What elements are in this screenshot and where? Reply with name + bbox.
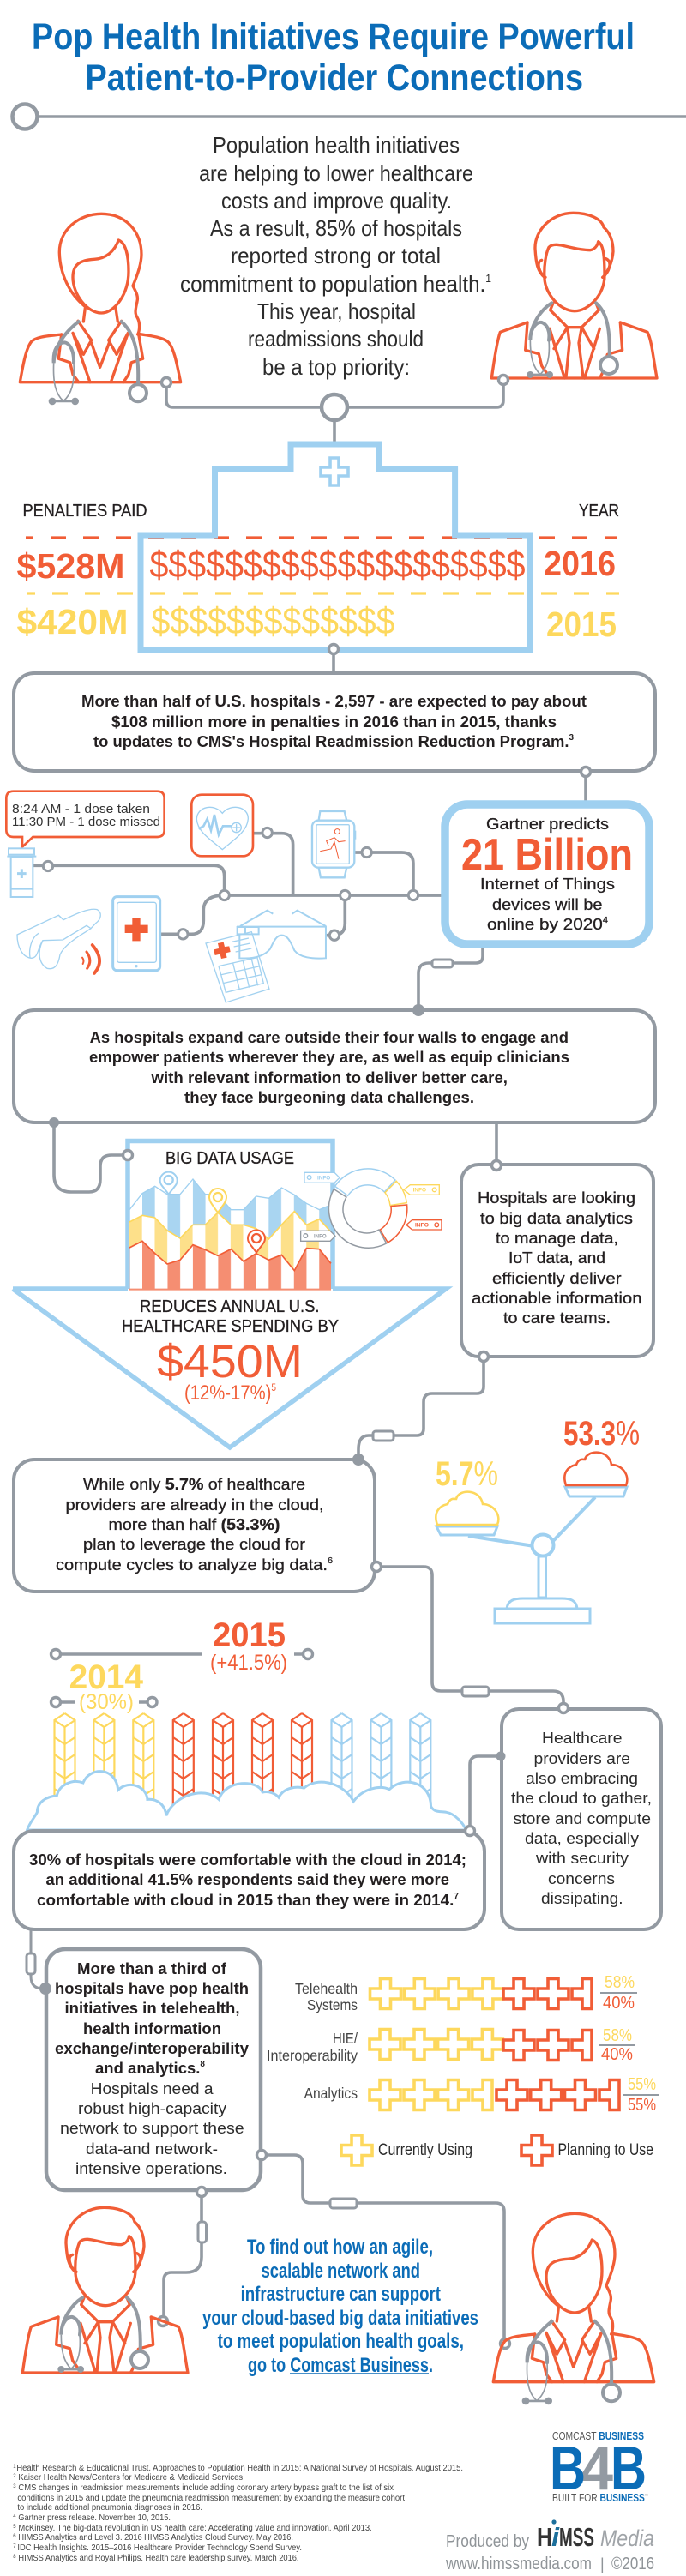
footnotes: CMS changes in readmission measurements include adding coronary artery bypass graft to the list of six — [18, 2483, 394, 2493]
penalties 2015 row: 2015 — [546, 605, 617, 644]
icon: tablet — [113, 897, 160, 971]
panel: pop health initiatives box: hospitals have pop health — [55, 1979, 249, 1997]
title: Patient-to-Provider Connections — [86, 57, 583, 99]
panel: cloud adoption text box: providers are already in the cloud, — [65, 1496, 324, 1514]
panel: penalties text box: More than half of U.S. hospitals - 2,597 - are expected to pay about — [81, 692, 587, 710]
panel: hospitals big data box: actionable information — [472, 1289, 641, 1307]
penalties 2016 row: $528M — [17, 546, 125, 586]
panel: healthcare providers box: store and compute — [513, 1809, 651, 1827]
panel: big data usage — [128, 1141, 333, 1289]
stat: 2014: (30%) — [79, 1690, 134, 1714]
connector: comfort box to pop health box — [27, 1929, 51, 1995]
stat: 5.7%: 5.7% — [436, 1455, 498, 1493]
panel: pop health initiatives box: exchange/interoperability — [55, 2039, 250, 2057]
connector: text box to Gartner — [581, 767, 590, 802]
panel: cloud adoption text box: 6 — [328, 1556, 333, 1566]
panel: penalties text box — [14, 673, 655, 771]
credit: Produced by HiMSS Media — [445, 2519, 654, 2573]
penalties 2015 row — [17, 600, 617, 644]
icon: female doctor bottom right — [493, 2213, 654, 2404]
chart row: HIE / interoperability — [267, 2026, 635, 2064]
panel: pop health initiatives box: robust high-capacity — [78, 2099, 227, 2117]
IoT device network — [6, 791, 446, 1002]
panel: healthcare providers box: providers are — [533, 1749, 630, 1767]
connector: Gartner to hospitals box — [418, 948, 483, 1010]
footnotes: 2 — [13, 2474, 16, 2479]
stat: 2015: 2015 — [213, 1616, 286, 1654]
icon: wifi waves — [82, 945, 99, 973]
dose callout text — [12, 802, 160, 829]
connector: text box to hospitals box — [492, 1122, 501, 1170]
chart row: HIE / interoperability: HIE/ — [333, 2030, 358, 2047]
panel: spending triangle: REDUCES ANNUAL U.S. — [140, 1297, 319, 1316]
panel: spending triangle: HEALTHCARE SPENDING BY — [122, 1317, 339, 1336]
panel: pop health initiatives box: 8 — [200, 2060, 205, 2069]
connector: pop health box to male doctor — [158, 2187, 206, 2326]
penalties header labels: PENALTIES PAID — [22, 502, 147, 521]
connector: text box to big data panel — [49, 1117, 132, 1192]
intro text: As a result, 85% of hospitals — [210, 215, 462, 241]
info tags: INFO — [314, 1234, 327, 1239]
call to action: scalable network and — [262, 2260, 420, 2283]
logo: Comcast Business B4B: BUILT FOR BUSINESS — [552, 2492, 654, 2504]
panel: pop health initiatives box: network to support these — [60, 2119, 244, 2137]
footnotes: McKinsey. The big-data revolution in US health care: Accelerating value and innovation. April 2013. — [18, 2524, 372, 2533]
footnotes: 7 — [13, 2544, 16, 2549]
panel: Gartner prediction: Internet of Things — [480, 875, 615, 893]
icon: map pins — [160, 1172, 265, 1253]
legend — [341, 2135, 653, 2165]
footnotes: 3 — [13, 2484, 16, 2489]
logo: Comcast Business B4B: B — [611, 2435, 647, 2503]
call to action: your cloud-based big data initiatives — [202, 2307, 478, 2330]
footnotes: 8 — [13, 2555, 16, 2560]
chart: data columns — [55, 1713, 430, 1821]
panel: pop health initiatives box: intensive operations. — [75, 2159, 227, 2177]
icon: hospital building — [141, 444, 530, 650]
panel: expanding care text box: empower patients wherever they are, as well as equip clinicians — [89, 1048, 569, 1066]
panel: Gartner prediction — [445, 804, 649, 944]
panel: expanding care text box — [14, 1010, 655, 1122]
connector: cloud box to providers box — [372, 1562, 563, 1708]
logo: Comcast Business B4B: ™ — [645, 2494, 648, 2499]
chart row: HIE / interoperability: 40% — [601, 2045, 633, 2064]
penalties 2015 row: $420M — [17, 602, 129, 641]
info tags: INFO — [413, 1189, 426, 1194]
icon: heart monitor — [191, 795, 253, 856]
chart: donut — [328, 1169, 407, 1248]
footnotes: Health Research & Educational Trust. Approaches to Population Health in 2015: A National Survey of Hospitals. August 2015. — [16, 2464, 463, 2473]
stat: 2015 — [51, 1616, 312, 1675]
legend: Currently Using — [378, 2141, 472, 2159]
icon: smart glasses — [237, 911, 326, 959]
call to action: to meet population health goals, — [218, 2330, 464, 2353]
footnotes: IDC Health Insights. 2015–2016 Healthcare Provider Technology Spend Survey. — [17, 2543, 302, 2553]
panel: cloud adoption text box: plan to leverage the cloud for — [83, 1535, 305, 1553]
panel: cloud adoption text box: While only 5.7% of healthcare — [83, 1475, 305, 1493]
panel: Gartner prediction: devices will be — [492, 895, 602, 913]
connector: title rule — [12, 105, 686, 129]
intro text: This year, hospital — [257, 298, 416, 324]
credit: Produced by HiMSS Media: H — [537, 2522, 552, 2552]
icon: male doctor bottom left — [22, 2207, 188, 2373]
chart row: HIE / interoperability: 58% — [603, 2026, 632, 2045]
panel: hospitals big data box: to manage data, — [496, 1229, 618, 1247]
panel: pop health initiatives box — [46, 1949, 261, 2190]
dashed row dividers — [26, 538, 619, 593]
intro text: readmissions should — [248, 326, 424, 352]
connector: pop health box to female doctor — [257, 2151, 509, 2348]
icon: smart watch — [312, 811, 356, 877]
panel: comfort with cloud text box: comfortable with cloud in 2015 than they were in 2014. — [37, 1891, 447, 1909]
panel: healthcare providers box: data, especially — [525, 1829, 640, 1847]
chart row: telehealth systems: Telehealth — [295, 1980, 358, 1997]
icon: balance scale with clouds — [436, 1453, 627, 1623]
panel: healthcare providers box: Healthcare — [542, 1729, 623, 1747]
footnotes: Kaiser Health News/Centers for Medicare & Medicaid Services. — [18, 2473, 245, 2483]
panel: pop health initiatives box: and analytics. — [95, 2059, 200, 2077]
intro text: are helping to lower healthcare — [199, 160, 473, 186]
panel: cloud adoption text box: more than half (53.3%) — [108, 1515, 280, 1533]
panel: pop health initiatives box: data-and network- — [86, 2140, 218, 2158]
panel: healthcare providers box — [502, 1709, 661, 1929]
footnotes: Gartner press release. November 10, 2015. — [18, 2513, 171, 2523]
panel: healthcare providers box: concerns — [548, 1869, 615, 1887]
logo: Comcast Business B4B: B — [550, 2435, 586, 2503]
intro text: costs and improve quality. — [221, 188, 452, 214]
stat: 2014: 2014 — [69, 1658, 144, 1696]
panel: penalties text box: to updates to CMS's Hospital Readmission Reduction Program. — [93, 732, 571, 750]
footnotes: 5 — [13, 2525, 16, 2530]
footnotes: HIMSS Analytics and Royal Philips. Health care leadership survey. March 2016. — [18, 2554, 299, 2563]
panel: hospitals big data box: efficiently deliver — [492, 1269, 621, 1287]
intro text: reported strong or total — [231, 243, 441, 268]
chart row: telehealth systems — [295, 1973, 637, 2013]
connector node: box top — [412, 1004, 424, 1016]
connector: hospitals box to cloud box — [352, 1351, 489, 1466]
dose callout text: 11:30 PM - 1 dose missed — [12, 815, 160, 829]
panel: penalties text box: $108 million more in penalties in 2016 than in 2015, thanks — [111, 713, 557, 731]
title — [32, 16, 635, 99]
footnotes: 6 — [13, 2534, 16, 2539]
chart row: analytics: 55% — [628, 2096, 656, 2115]
panel: Gartner prediction: 21 Billion — [461, 830, 633, 880]
panel: expanding care text box: As hospitals expand care outside their four walls to engage and — [90, 1028, 569, 1046]
credit: Produced by HiMSS Media: ©2016 — [611, 2555, 654, 2573]
legend: Planning to Use — [557, 2141, 653, 2159]
panel: hospitals big data box — [461, 1165, 653, 1357]
credit: Produced by HiMSS Media: Produced by — [446, 2532, 529, 2551]
stat: 53.3%: 53.3% — [563, 1415, 640, 1453]
intro text — [180, 132, 491, 380]
call to action — [202, 2236, 478, 2377]
logo: Comcast Business B4B — [550, 2430, 648, 2504]
icon: chart clipboard — [206, 932, 269, 1002]
chart row: analytics — [304, 2075, 659, 2115]
panel: hospitals big data box: Hospitals are looking — [478, 1189, 635, 1207]
panel: hospitals big data box: IoT data, and — [508, 1249, 605, 1267]
credit: Produced by HiMSS Media: | — [600, 2555, 605, 2573]
penalties 2016 row: $$$$$$$$$$$$$$$$$$$$ — [149, 544, 525, 586]
panel: cloud adoption text box — [14, 1460, 375, 1592]
panel: healthcare providers box: with security — [535, 1849, 629, 1867]
logo: Comcast Business B4B: COMCAST BUSINESS — [552, 2430, 644, 2442]
panel: spending triangle: $450M — [157, 1336, 303, 1387]
chart row: telehealth systems: Systems — [307, 1996, 358, 2013]
call to action: To find out how an agile, — [247, 2236, 433, 2259]
panel: pop health initiatives box: Hospitals need a — [91, 2079, 214, 2098]
panel: comfort with cloud text box: 30% of hospitals were comfortable with the cloud in 2014; — [29, 1851, 466, 1869]
chart row: telehealth systems: 58% — [605, 1973, 635, 1992]
footnotes — [13, 2464, 463, 2563]
info tags: INFO — [415, 1224, 429, 1229]
chart row: analytics: 55% — [628, 2075, 656, 2094]
panel: comfort with cloud text box — [14, 1831, 484, 1929]
footnotes: conditions in 2015 and update the pneumonia readmission measurement by expanding the measure cohort — [17, 2494, 405, 2503]
penalties 2016 row: 2016 — [544, 544, 616, 583]
connector: IoT ring nodes — [43, 828, 418, 940]
intro text: be a top priority: — [262, 354, 410, 380]
intro text: 1 — [485, 272, 491, 285]
footnotes: 4 — [13, 2514, 16, 2519]
panel: big data usage: BIG DATA USAGE — [165, 1149, 294, 1168]
intro text: Population health initiatives — [213, 132, 460, 158]
panel: cloud adoption text box: compute cycles to analyze big data. — [56, 1556, 307, 1574]
panel: Gartner prediction: 4 — [603, 916, 608, 925]
icon: pill bottle — [7, 848, 36, 897]
connector: hospital to text box — [329, 645, 338, 673]
panel: healthcare providers box: dissipating. — [541, 1889, 623, 1907]
chart row: telehealth systems: 40% — [603, 1994, 635, 2013]
icon: dose callout — [6, 791, 165, 847]
chart row: HIE / interoperability: Interoperability — [267, 2047, 358, 2064]
penalties header labels — [22, 502, 619, 521]
call to action: go to Comcast Business. — [248, 2354, 433, 2377]
credit: Produced by HiMSS Media: MSS — [559, 2522, 594, 2552]
connector: IoT bus wires — [33, 834, 446, 936]
panel: comfort with cloud text box: 7 — [454, 1892, 459, 1901]
panel: healthcare providers box: also embracing — [526, 1769, 638, 1787]
info tags — [301, 1172, 442, 1241]
chart: big data line areas — [129, 1169, 442, 1290]
icon: female doctor top left — [20, 214, 181, 405]
stat: 2014 — [51, 1658, 157, 1714]
credit: Produced by HiMSS Media: Media — [600, 2525, 654, 2551]
panel: penalties text box: 3 — [569, 733, 574, 743]
icon: wearable band — [17, 909, 100, 969]
panel: spending triangle — [13, 1289, 446, 1447]
footnotes: HIMSS Analytics and Level 3. 2016 HIMSS Analytics Cloud Survey. May 2016. — [18, 2533, 293, 2543]
call to action: infrastructure can support — [241, 2283, 441, 2306]
penalties header labels: YEAR — [579, 502, 619, 521]
panel: spending triangle: (12%-17%) — [184, 1381, 287, 1405]
credit: Produced by HiMSS Media: www.himssmedia.com — [445, 2555, 592, 2573]
panel: expanding care text box: with relevant information to deliver better care, — [150, 1068, 508, 1086]
panel: Gartner prediction: Gartner predicts — [486, 815, 609, 833]
footnotes: 1 — [13, 2465, 16, 2470]
chart row: analytics: Analytics — [304, 2085, 358, 2102]
penalties 2015 row: $$$$$$$$$$$$$ — [151, 600, 394, 642]
dose callout text: 8:24 AM - 1 dose taken — [12, 802, 150, 816]
panel: spending triangle: 5 — [271, 1381, 276, 1393]
panel: Gartner prediction: online by 2020 — [487, 915, 590, 933]
connector: providers box to cloud — [465, 1703, 568, 1835]
panel: healthcare providers box: the cloud to gather, — [511, 1789, 652, 1807]
panel: hospitals big data box: to care teams. — [503, 1309, 611, 1327]
icon: male doctor top right — [491, 213, 657, 378]
connector: doctors to hospital — [161, 376, 508, 444]
intro text: commitment to population health. — [180, 271, 508, 297]
credit: Produced by HiMSS Media: i — [551, 2522, 560, 2552]
icon: big cloud — [27, 1772, 466, 1830]
panel: hospitals big data box: to big data analytics — [480, 1209, 633, 1227]
panel: pop health initiatives box: health information — [83, 2019, 221, 2037]
panel: comfort with cloud text box: an additional 41.5% respondents said they were more — [46, 1870, 449, 1888]
info tags: INFO — [317, 1176, 331, 1181]
footnotes: to include additional pneumonia diagnoses in 2016. — [17, 2503, 202, 2513]
logo: Comcast Business B4B: 4 — [581, 2435, 613, 2503]
panel: expanding care text box: they face burgeoning data challenges. — [184, 1088, 474, 1106]
panel: pop health initiatives box: initiatives in telehealth, — [65, 1999, 240, 2017]
stat: 2015: (+41.5%) — [210, 1651, 287, 1675]
panel: pop health initiatives box: More than a third of — [77, 1959, 227, 1977]
